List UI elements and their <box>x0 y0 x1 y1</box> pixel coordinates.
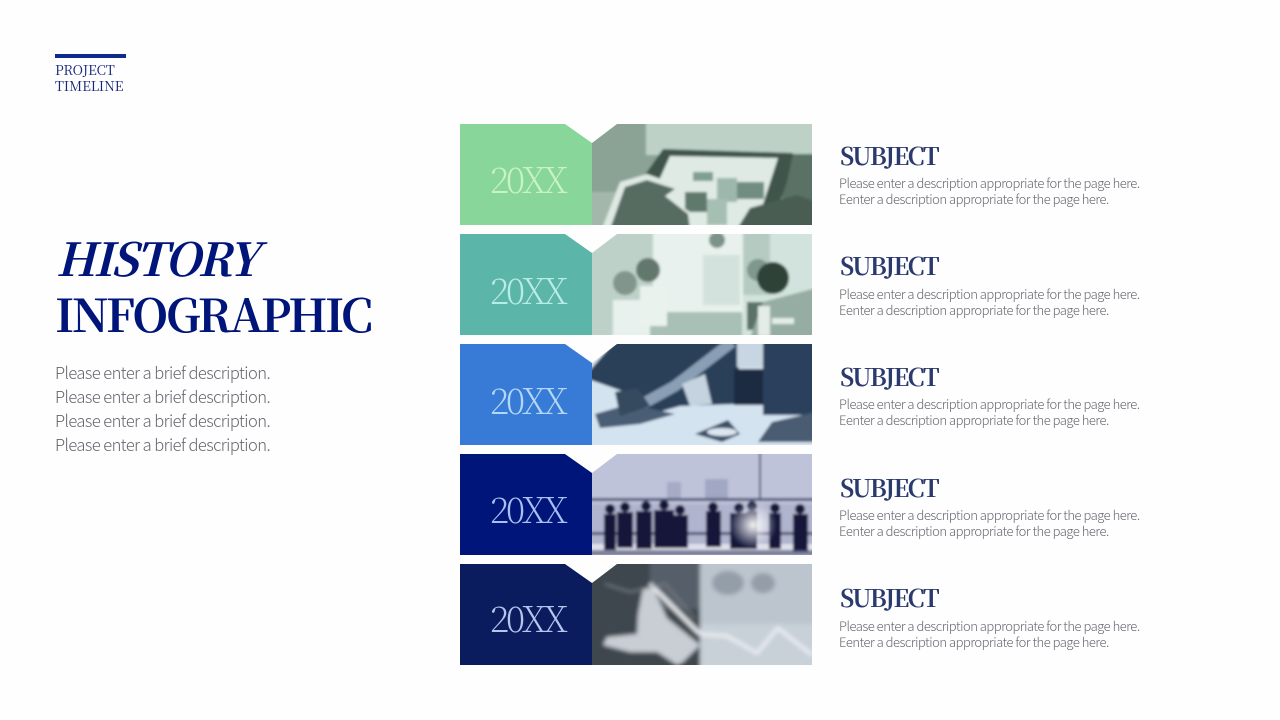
description <box>839 394 1140 429</box>
intro description <box>55 360 270 456</box>
year label: 20XX <box>490 374 568 425</box>
subject heading: SUBJECT <box>840 137 938 172</box>
photo: hands on tablet <box>592 124 812 225</box>
description: Please enter a description appropriate for the page here. <box>839 616 1140 635</box>
description: Eenter a description appropriate for the page here. <box>839 410 1109 429</box>
year label: 20XX <box>490 483 568 534</box>
main title: INFOGRAPHIC <box>55 281 370 346</box>
year label: 20XX <box>490 153 568 204</box>
intro description: Please enter a brief description. <box>55 384 270 408</box>
description <box>839 505 1140 540</box>
timeline row 3 <box>460 344 1140 445</box>
timeline row 5 <box>460 564 1140 665</box>
timeline row 1 <box>460 124 1140 225</box>
year label: 20XX <box>490 592 568 643</box>
label accent bar <box>55 54 126 58</box>
year band <box>460 124 592 225</box>
subject heading: SUBJECT <box>840 469 938 504</box>
photo: hands over blueprints <box>592 344 812 445</box>
intro description: Please enter a brief description. <box>55 360 270 384</box>
main title <box>55 225 371 346</box>
label text: PROJECT <box>55 59 115 79</box>
description: Please enter a description appropriate for the page here. <box>839 284 1140 303</box>
description <box>839 173 1140 208</box>
intro description: Please enter a brief description. <box>55 432 270 456</box>
description <box>839 616 1140 651</box>
timeline row 4 <box>460 454 1140 555</box>
timeline row 2 <box>460 234 1140 335</box>
main title: HISTORY <box>56 225 258 290</box>
description <box>839 284 1140 319</box>
description: Eenter a description appropriate for the page here. <box>839 632 1109 651</box>
year band <box>460 564 592 665</box>
description: Please enter a description appropriate for the page here. <box>839 173 1140 192</box>
year band <box>460 234 592 335</box>
description: Please enter a description appropriate for the page here. <box>839 505 1140 524</box>
label text: TIMELINE <box>55 75 123 95</box>
description: Eenter a description appropriate for the page here. <box>839 189 1109 208</box>
year label: 20XX <box>490 264 568 315</box>
description: Eenter a description appropriate for the page here. <box>839 300 1109 319</box>
year band <box>460 454 592 555</box>
year band <box>460 344 592 445</box>
photo: hand pointing at growth chart <box>592 564 812 665</box>
subject heading: SUBJECT <box>840 579 938 614</box>
description: Please enter a description appropriate for the page here. <box>839 394 1140 413</box>
label text <box>55 59 123 95</box>
photo: team meeting <box>592 234 812 335</box>
subject heading: SUBJECT <box>840 247 938 282</box>
section label: project timeline <box>55 54 126 95</box>
subject heading: SUBJECT <box>840 358 938 393</box>
intro description: Please enter a brief description. <box>55 408 270 432</box>
description: Eenter a description appropriate for the page here. <box>839 521 1109 540</box>
photo: silhouettes of business people <box>592 454 812 555</box>
